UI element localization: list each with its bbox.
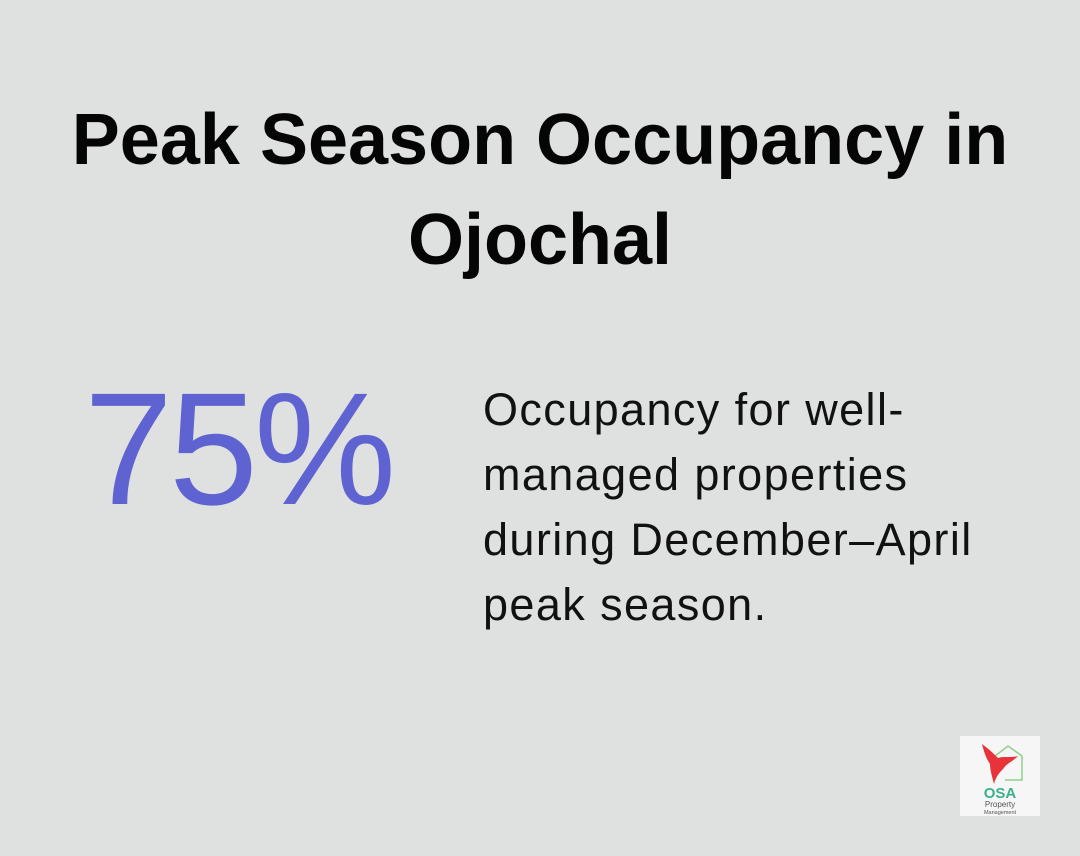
description text: managed properties (483, 449, 908, 500)
description text: Occupancy for well- (483, 384, 905, 435)
title: Peak Season Occupancy in (72, 100, 1008, 180)
title (72, 100, 1008, 280)
logo: OSA Property Management: Management (984, 810, 1017, 816)
description text: during December–April (483, 514, 973, 565)
description text (483, 384, 973, 630)
logo: OSA Property Management: Property (985, 800, 1015, 809)
logo: OSA Property Management: OSA (984, 785, 1016, 802)
description text: peak season. (483, 579, 768, 630)
logo: OSA Property Management (960, 736, 1040, 816)
big stat: 75%: 75% (84, 359, 392, 538)
title: Ojochal (408, 200, 672, 280)
